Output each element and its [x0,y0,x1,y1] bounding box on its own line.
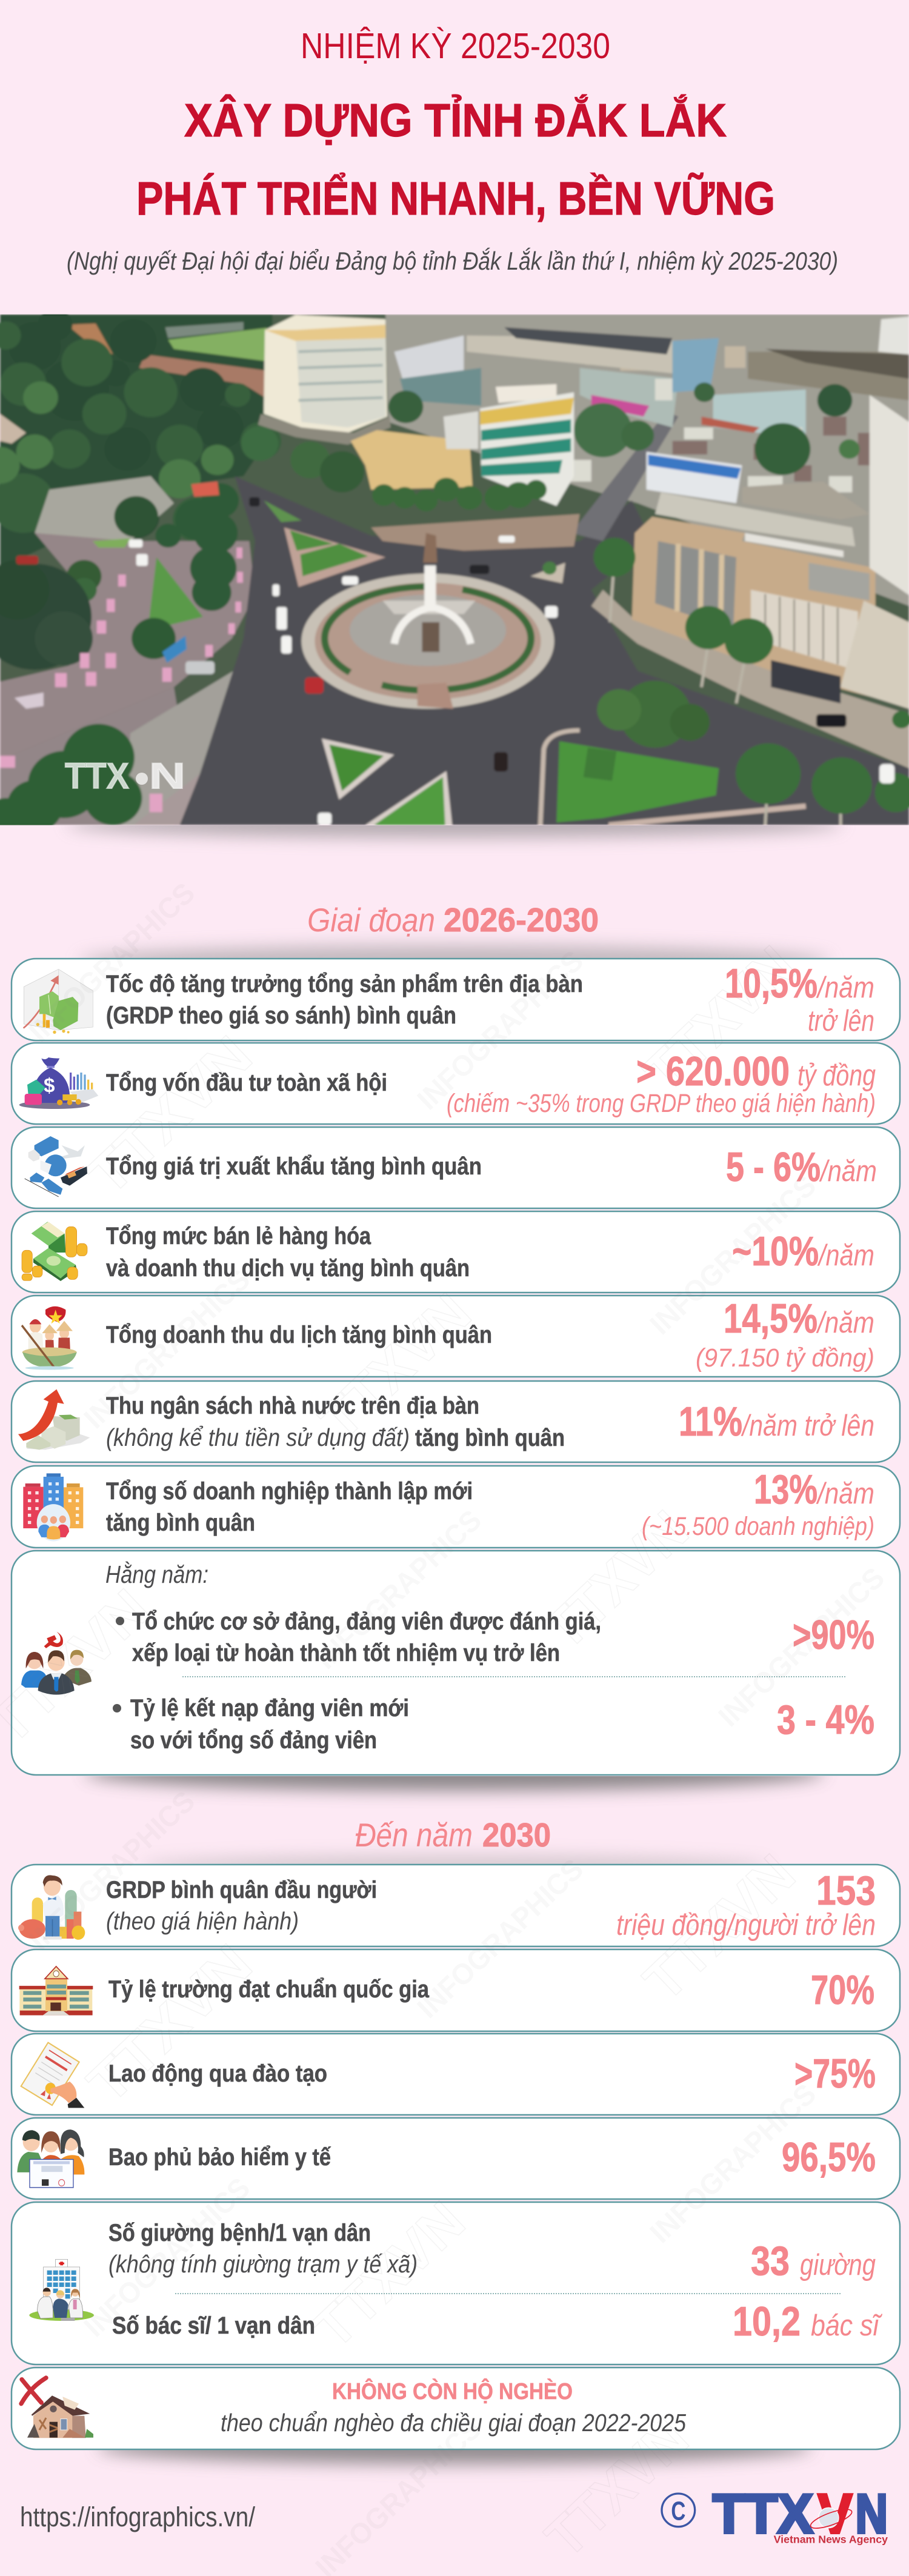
value: 13% [754,1466,817,1513]
label: Tốc độ tăng trưởng tổng sản phẩm trên địa bàn [106,971,583,997]
watermarks: INFOGRAPHICS [23,1785,201,1957]
bullet [116,1617,124,1625]
watermarks: TTXVN [308,1282,482,1452]
label: Tổng mức bán lẻ hàng hóa [106,1223,371,1250]
card: tourism revenue [12,1296,900,1377]
watermarks [0,877,891,2576]
card: total investment [12,1043,900,1124]
heading: Giai đoạn 2026-2030: 2026-2030 [444,901,599,939]
title: term: NHIỆM KỲ 2025-2030 [301,26,610,66]
watermarks: INFOGRAPHICS [644,1170,822,1341]
heading: KHÔNG CÒN HỘ NGHÈO [332,2377,573,2405]
label bold part: tăng bình quân [415,1425,565,1451]
watermarks: TTXVN [534,1499,700,1661]
watermarks: INFOGRAPHICS [78,2172,256,2343]
header titles [67,26,838,275]
heading: Đến năm 2030: 2030 [482,1816,551,1854]
unit: giường [800,2249,876,2281]
icon: people with insurance card [17,2129,84,2188]
icon: money bag [19,1057,98,1109]
value: 3 - 4% [777,1697,874,1743]
logo letters TTX: TTX [713,2483,813,2544]
logo globe [808,2506,854,2532]
value: 96,5% [782,2134,876,2180]
logo letter V: V [818,2483,852,2544]
label line 2: và doanh thu dịch vụ tăng bình quân [106,1255,470,1282]
text: new party members: Tỷ lệ kết nạp đảng viên mới [130,1695,409,1722]
watermarks: TTXVN [633,1843,807,2013]
icon: hospital and medical staff [29,2259,94,2321]
watermarks: TTXVN [76,1024,264,1207]
icon: buildings and people [23,1473,83,1542]
label: Tổng số doanh nghiệp thành lập mới [106,1478,473,1505]
card: no poor households [12,2368,900,2449]
icon: tourists in basket boat [22,1306,77,1370]
label line 2: (GRDP theo giá so sánh) bình quân [106,1002,456,1029]
text: party organisations: Tổ chức cơ sở đảng, đảng viên được đánh giá, [132,1608,601,1635]
watermarks: INFOGRAPHICS [411,945,590,1116]
unit: /năm [816,1306,874,1339]
footer source link: https://infographics.vn/ [20,2501,255,2532]
watermarks: INFOGRAPHICS [310,1504,488,1676]
note: (97.150 tỷ đồng) [696,1343,874,1373]
unit note: trở lên [808,1005,874,1037]
card: trained labour [12,2034,900,2115]
watermarks: TTXVN [633,934,807,1105]
value: >90% [793,1612,874,1658]
icon: money bag: $ [44,1075,55,1097]
photo watermark TTXVN: N [149,756,185,796]
label: GRDP bình quân đầu người [106,1877,377,1903]
value: 70% [811,1967,874,2013]
card: exports [12,1127,900,1208]
value: 5 - 6% [726,1144,821,1190]
photo watermark TTXVN: TTX [65,756,129,796]
bullet [113,1704,121,1712]
agency name: Vietnam News Agency [774,2534,888,2546]
heading: Đến năm 2030: Đến năm [355,1816,473,1854]
value: ~10% [732,1228,819,1274]
label: Bao phủ bảo hiểm y tế [108,2144,331,2171]
icon: logistics [25,1136,87,1197]
label: Tổng doanh thu du lịch tăng bình quân [106,1322,492,1348]
unit: /năm [816,1477,874,1510]
icon: diploma in hand [21,2043,84,2108]
watermarks: TTXVN [534,2408,700,2569]
watermarks: INFOGRAPHICS [411,1853,590,2025]
watermarks: INFOGRAPHICS [23,877,201,1048]
icon: party members with hammer and sickle [21,1632,92,1695]
label: Tổng giá trị xuất khẩu tăng bình quân [106,1153,482,1180]
logo letter N: N [856,2483,888,2544]
watermarks: INFOGRAPHICS [644,2078,822,2249]
unit: tỷ đồng [797,1059,876,1092]
card: national-standard schools [12,1949,900,2031]
value: 10,5% [725,960,817,1007]
unit: /năm [819,1155,877,1188]
logo: TTXVN Vietnam News Agency [662,2483,888,2546]
unit: /năm [817,1239,874,1272]
watermarks: INFOGRAPHICS [713,1562,891,1733]
icon: crossed out ruined house [21,2378,93,2438]
icon: rising arrow and cash [18,1390,90,1450]
subtext: theo chuẩn nghèo đa chiều giai đoạn 2022-2025 [221,2409,686,2437]
heading: Giai đoạn 2026-2030: Giai đoạn [307,901,435,939]
text line 2: xếp loại từ hoàn thành tốt nhiệm vụ trở lên [132,1640,560,1666]
heading: Đến năm 2030 [355,1816,551,1854]
copyright mark: C [671,2497,685,2526]
value: 153 [816,1868,876,1914]
unit: bác sĩ [811,2309,882,2342]
value: beds: 33 [751,2238,790,2284]
text line 2: so với tổng số đảng viên [130,1727,377,1754]
value: 14,5% [724,1296,817,1342]
label: Tỷ lệ trường đạt chuẩn quốc gia [108,1976,430,2003]
aerial photo of Buon Ma Thuot roundabout [0,308,909,832]
icon: school [19,1966,93,2015]
heading: Hằng năm: Hằng năm: [105,1560,208,1588]
card: GRDP per capita [12,1865,900,1946]
unit: /năm trở lên [741,1409,874,1442]
title: line 1: XÂY DỰNG TỈNH ĐẮK LẮK [184,94,727,147]
label: doctors: Số bác sĩ/ 1 vạn dân [112,2312,315,2339]
copyright mark [662,2494,695,2527]
label note: (theo giá hiện hành) [106,1907,299,1935]
watermarks: INFOGRAPHICS [78,1263,256,1435]
value: 11% [679,1399,742,1445]
unit: /năm [816,971,874,1004]
label italic part: (không kể thu tiền sử dụng đất) [106,1423,410,1451]
card: retail sales [12,1211,900,1293]
label: Tổng vốn đầu tư toàn xã hội [106,1070,387,1096]
heading: Giai đoạn 2026-2030 [307,901,599,939]
card: health insurance [12,2118,900,2199]
value: doctors: 10,2 [733,2298,801,2345]
value: > 620.000 [636,1048,790,1094]
photo watermark TTXVN [65,756,185,796]
card: beds and doctors [12,2202,900,2365]
card: state budget revenue [12,1381,900,1462]
card: party development yearly [12,1551,900,1775]
title: line 2: PHÁT TRIỂN NHANH, BỀN VỮNG [136,172,775,225]
card: GRDP growth [12,959,900,1040]
value: >75% [794,2051,876,2097]
label: Lao động qua đào tạo [108,2060,327,2087]
icon: chart with money stacks [24,969,93,1034]
label note: (không tính giường trạm y tế xã) [108,2250,418,2278]
card: new enterprises [12,1466,900,1548]
watermarks: TTXVN [302,2190,476,2360]
icon: man with piggy bank [18,1875,85,1940]
icon: cash and coins [22,1222,87,1281]
watermarks: TTXVN [76,1932,264,2115]
label: Số giường bệnh/1 vạn dân [108,2220,371,2246]
label line 2: tăng bình quân [106,1509,255,1536]
label: Thu ngân sách nhà nước trên địa bàn [106,1393,479,1419]
